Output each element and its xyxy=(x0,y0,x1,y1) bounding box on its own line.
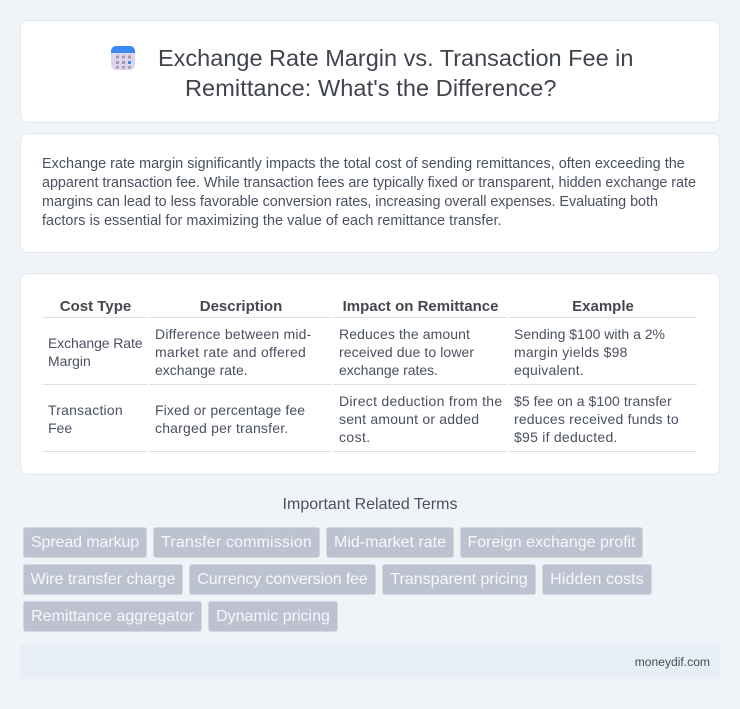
table header: Impact on Remittance xyxy=(343,298,498,315)
tag: Wire transfer charge xyxy=(31,571,175,588)
table row: exchange rate margin: exchange rate. xyxy=(155,362,248,378)
tag: Hidden costs xyxy=(550,571,644,588)
tag: Spread markup xyxy=(31,534,139,551)
table row: transaction fee: charged per transfer. xyxy=(155,420,288,436)
tag: Foreign exchange profit xyxy=(467,534,636,551)
tag xyxy=(153,527,320,558)
intro text panel: factors is essential for maximizing the value of each remittance transfer. xyxy=(42,213,502,229)
table row: transaction fee: Direct deduction from the xyxy=(339,393,502,409)
tag xyxy=(326,527,454,558)
tag xyxy=(23,601,202,632)
table row: exchange rate margin: received due to lower xyxy=(339,344,474,360)
table header: Cost Type xyxy=(60,298,131,315)
table header xyxy=(60,298,634,315)
table row: transaction fee: $5 fee on a $100 transfer xyxy=(514,393,672,409)
table row: transaction fee: Transaction xyxy=(48,402,123,418)
related terms heading: Important Related Terms xyxy=(283,496,457,513)
intro text panel xyxy=(20,133,720,253)
title: Remittance: What's the Difference? xyxy=(185,75,557,101)
related term tags xyxy=(23,527,652,632)
comparison table panel xyxy=(20,273,720,475)
title xyxy=(158,45,633,101)
table row: exchange rate margin: equivalent. xyxy=(514,362,584,378)
tag: Transfer commission xyxy=(161,534,312,551)
tag xyxy=(542,564,652,595)
tag: Dynamic pricing xyxy=(216,608,330,625)
table row: exchange rate margin xyxy=(48,326,665,378)
table row: exchange rate margin: Exchange Rate xyxy=(48,335,142,351)
footer bar xyxy=(20,645,720,679)
icon: calendar xyxy=(111,46,135,70)
title card xyxy=(20,20,720,123)
tag xyxy=(23,564,183,595)
intro text panel: Exchange rate margin significantly impacts the total cost of sending remittances, often exceeding the xyxy=(42,156,685,172)
tag xyxy=(208,601,338,632)
table row: exchange rate margin: Margin xyxy=(48,353,91,369)
table row: transaction fee: sent amount or added xyxy=(339,411,479,427)
intro text panel: margins can lead to less favorable conversion rates, increasing overall expenses. Evaluating both xyxy=(42,194,658,210)
title: Exchange Rate Margin vs. Transaction Fee in xyxy=(158,45,633,71)
intro text panel: apparent transaction fee. While transaction fees are typically fixed or transparent, hidden exchange rate xyxy=(42,175,696,191)
tag: Mid-market rate xyxy=(334,534,446,551)
table row: exchange rate margin: Sending $100 with a 2% xyxy=(514,326,665,342)
tag: Currency conversion fee xyxy=(197,571,368,588)
table row: exchange rate margin: market rate and offered xyxy=(155,344,306,360)
table row: transaction fee: reduces received funds to xyxy=(514,411,679,427)
tag: Transparent pricing xyxy=(390,571,528,588)
tag xyxy=(382,564,536,595)
tag xyxy=(460,527,643,558)
source credit: moneydif.com xyxy=(635,655,710,669)
table row: exchange rate margin: Difference between mid- xyxy=(155,326,312,342)
table row: exchange rate margin: exchange rates. xyxy=(339,362,438,378)
tag xyxy=(23,527,147,558)
table row: transaction fee: Fixed or percentage fee xyxy=(155,402,305,418)
table row: transaction fee xyxy=(48,393,679,445)
table header: Example xyxy=(572,298,634,315)
tag: Remittance aggregator xyxy=(31,608,194,625)
tag xyxy=(189,564,376,595)
table row: exchange rate margin: Reduces the amount xyxy=(339,326,470,342)
table row: exchange rate margin: margin yields $98 xyxy=(514,344,628,360)
table row: transaction fee: cost. xyxy=(339,429,371,445)
table header: Description xyxy=(200,298,282,315)
table row: transaction fee: Fee xyxy=(48,420,72,436)
table row: transaction fee: $95 if deducted. xyxy=(514,429,618,445)
